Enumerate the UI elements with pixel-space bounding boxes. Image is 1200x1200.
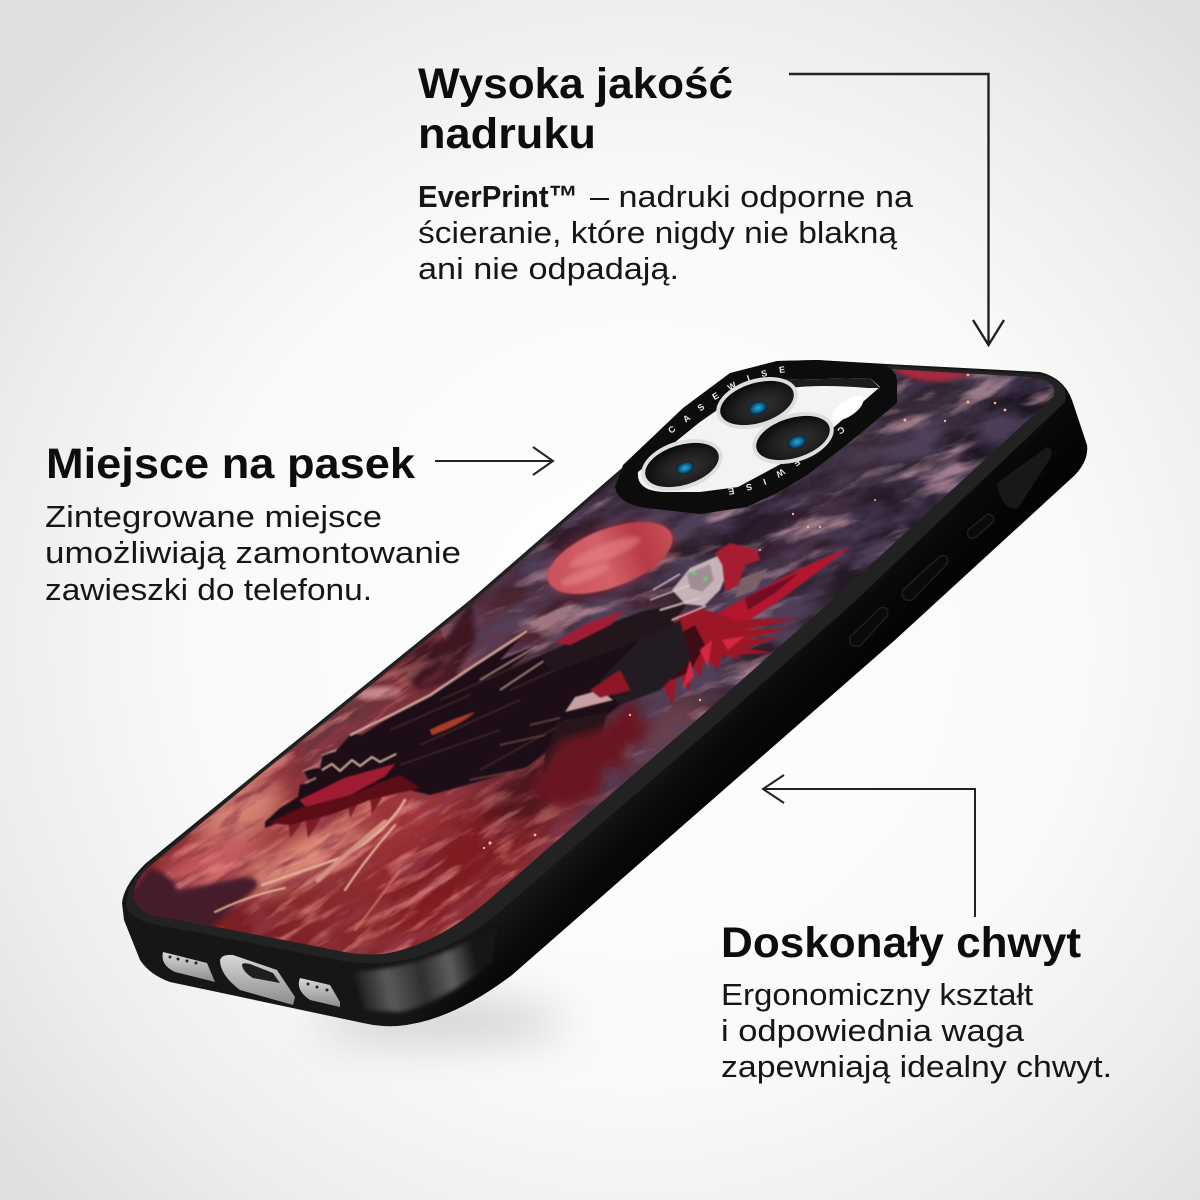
pink cloud highlight (353, 685, 401, 701)
arrow (789, 74, 1004, 345)
body text: EverPrint™ (418, 179, 578, 214)
crimson cliff (393, 600, 475, 690)
screen rim (126, 364, 1066, 963)
lens top (710, 368, 804, 438)
glowing lower sky (148, 754, 567, 932)
corner gloss (352, 925, 498, 1012)
side buttons (850, 447, 1052, 646)
lens middle (746, 403, 840, 473)
body text: Zintegrowane miejsce (45, 499, 382, 534)
body text (418, 179, 914, 286)
phone case (122, 360, 1088, 1026)
plate highlight (829, 391, 867, 425)
body text (721, 977, 1112, 1084)
callout: strap slot (45, 440, 553, 607)
dark lower-left cloud (134, 866, 260, 926)
bump frame (615, 360, 897, 514)
pale dragon tail tendrils (215, 800, 405, 930)
camera bump (615, 360, 897, 514)
callout: grip (721, 775, 1112, 1084)
flames below figure (530, 700, 650, 810)
body text: – nadruki odporne na (590, 179, 914, 214)
body text (45, 499, 461, 607)
phone drop shadow (315, 1002, 565, 1042)
white camera plate (638, 378, 880, 492)
printed artwork (134, 362, 1054, 954)
body text: zawieszki do telefonu. (45, 572, 372, 607)
speaker right (299, 978, 340, 1007)
wings and cape (663, 546, 852, 704)
arrow (763, 775, 975, 917)
brand lettering mirrored: CASEWISE (728, 427, 844, 495)
body text: umożliwiają zamontowanie (45, 535, 461, 570)
charging port (220, 955, 295, 1005)
heading: nadruku (418, 110, 596, 158)
body text: ani nie odpadają. (418, 251, 679, 286)
heading: Miejsce na pasek (46, 440, 415, 488)
plate top shade (745, 378, 880, 398)
brand lettering: CASEWISE (668, 366, 786, 433)
heroine figure (540, 543, 768, 795)
blood moon (542, 515, 678, 600)
body text: Ergonomiczny kształt (721, 977, 1033, 1012)
arrow (435, 447, 553, 475)
red corner glow (891, 369, 973, 385)
body text: zapewniają idealny chwyt. (721, 1049, 1112, 1084)
speaker left (162, 952, 215, 982)
heading: Wysoka jakość (418, 60, 733, 108)
callout: print quality (418, 60, 1004, 345)
heading: Doskonały chwyt (721, 919, 1081, 967)
body text: ścieranie, które nigdy nie blakną (418, 215, 898, 250)
embers (483, 374, 1006, 849)
lens bottom (635, 430, 729, 500)
soft colour fields (272, 357, 1000, 787)
case body (122, 360, 1087, 1026)
body text: i odpowiednia waga (721, 1013, 1025, 1048)
fire texture (134, 604, 642, 954)
cloud texture (440, 369, 1054, 824)
dragon body (265, 630, 640, 838)
heading (418, 60, 733, 158)
